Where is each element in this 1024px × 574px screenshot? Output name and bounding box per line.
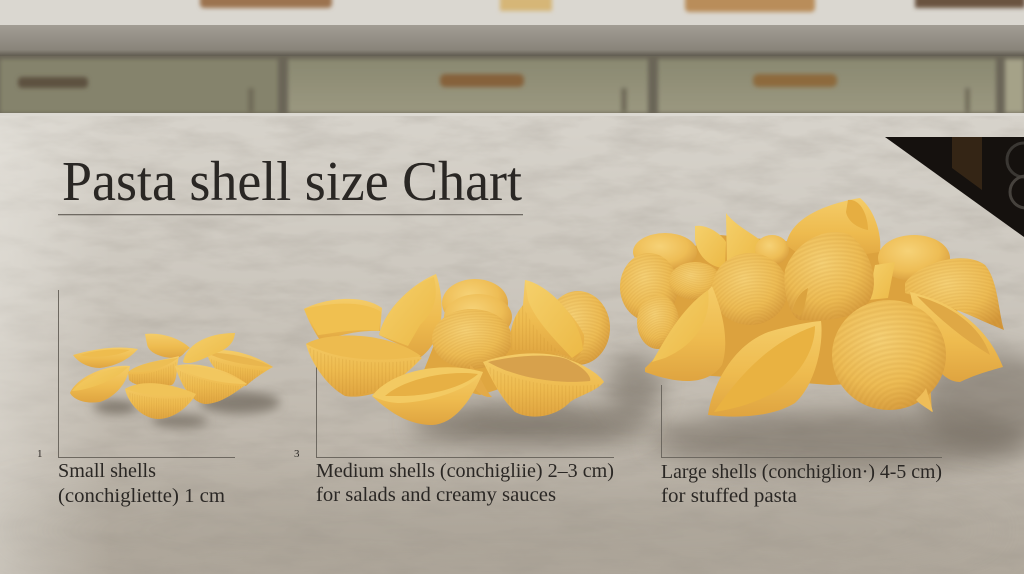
- small shell 1: [73, 348, 138, 368]
- medium shell: front left open: [306, 335, 422, 397]
- medium shell number: 3: [294, 448, 300, 460]
- medium shell: back stack: [442, 279, 512, 340]
- large shell: left open: [645, 286, 725, 381]
- small shell label: (conchigliette) 1 cm: [58, 485, 225, 507]
- small shell 5: [128, 356, 179, 387]
- cluster: large shells: [620, 198, 1004, 417]
- cluster: small shells: [70, 333, 273, 419]
- medium shell label: Medium shells (conchigliie) 2–3 cm): [316, 460, 614, 482]
- small shell axes: [58, 290, 235, 458]
- large shell: left ribbed small: [637, 262, 721, 349]
- objects on back counter: [200, 0, 1024, 12]
- small shell label: Small shells: [58, 460, 156, 482]
- small shell 3: [145, 334, 190, 358]
- large shell: back top: [786, 198, 880, 262]
- table shadows under the shells: [0, 350, 1024, 570]
- small shell 4: [183, 333, 235, 363]
- large shell: front center open: [708, 321, 822, 417]
- large shell: back small opens: [695, 213, 789, 268]
- medium shell: upright open: [379, 274, 442, 359]
- medium shell: front right open: [483, 353, 604, 417]
- small shell 8: [125, 383, 196, 419]
- large shell: middle ribbed: [712, 253, 788, 325]
- medium shell: hidden base: [470, 365, 492, 397]
- large shell axes: [662, 385, 942, 458]
- medium shell filler: [420, 330, 600, 395]
- back counter edge: [0, 25, 1024, 56]
- medium shell: front center open: [372, 367, 483, 425]
- large shell: right ribbed: [905, 258, 1004, 330]
- medium shell: back left open: [304, 299, 382, 343]
- large shell: right back: [868, 235, 950, 300]
- large shell label: for stuffed pasta: [661, 485, 797, 507]
- induction cooktop: [885, 137, 1024, 237]
- large shell: hidden center: [640, 235, 960, 385]
- small shell 6: [175, 364, 247, 404]
- back counter top: [0, 0, 1024, 26]
- cabinet fronts: [0, 59, 1024, 113]
- cabinet handles: [18, 74, 837, 88]
- background: blurred kitchen cabinets: [0, 0, 1024, 115]
- medium shell: tilted open: [510, 280, 584, 358]
- small shell 7: [207, 350, 273, 386]
- small shell number: 1: [37, 448, 42, 460]
- cluster: medium shells: [304, 274, 610, 425]
- title: Pasta shell size Chart: [62, 151, 522, 213]
- large shell: back left: [620, 233, 697, 321]
- medium shell label: for salads and creamy sauces: [316, 484, 556, 506]
- large shell: front right ribbed: [832, 300, 946, 412]
- title rule: [58, 214, 523, 215]
- medium shell: ribbed back: [546, 291, 610, 365]
- large shell label: Large shells (conchiglion·) 4-5 cm): [661, 461, 942, 483]
- medium shell axes: [316, 365, 614, 458]
- large shell: center ribbed: [784, 232, 874, 320]
- medium shell: central ribbed: [432, 309, 512, 369]
- large shell: right open: [910, 292, 1003, 382]
- small shell 2: [70, 366, 130, 403]
